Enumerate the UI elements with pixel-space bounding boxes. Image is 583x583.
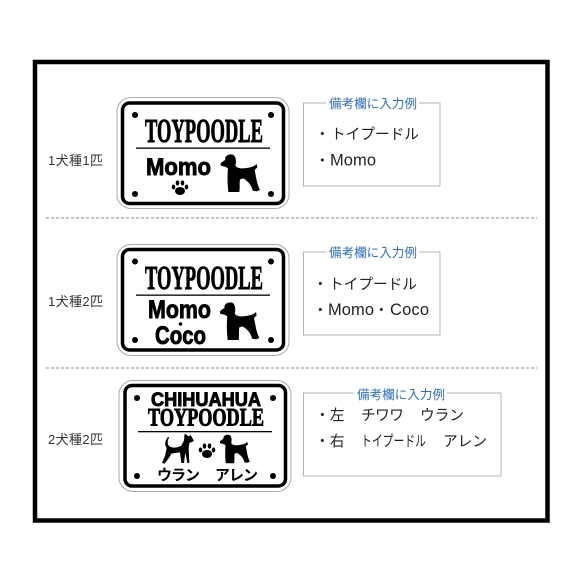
note box 1: トイプードル bbox=[331, 126, 419, 143]
note box 3: ・左 bbox=[315, 407, 344, 424]
note box 3 bbox=[304, 388, 501, 476]
note box 2: 備考欄に入力例 bbox=[329, 246, 417, 260]
note box 3: チワワ bbox=[361, 408, 404, 424]
plate 2: toy poodle, Momo and Coco: TOYPOODLE bbox=[145, 260, 263, 297]
note box 3: アレン bbox=[443, 434, 487, 450]
note box 2: ・ bbox=[374, 303, 389, 319]
note box 3: 備考欄に入力例 bbox=[357, 388, 445, 402]
note box 1: 備考欄に入力例 bbox=[329, 97, 417, 111]
plate 2: toy poodle, Momo and Coco: Momo bbox=[148, 296, 211, 324]
divider: row 1 and 2 bbox=[46, 217, 537, 219]
note box 1 bbox=[304, 97, 440, 186]
note box 2: Momo bbox=[328, 301, 374, 319]
row label: 1犬種2匹: 1犬種2匹 bbox=[48, 294, 103, 309]
note box 2: Coco bbox=[390, 301, 429, 319]
note box 1: ・ bbox=[315, 127, 330, 143]
note box 3: ・右 bbox=[315, 433, 344, 450]
note box 2: トイプードル bbox=[329, 276, 417, 293]
divider: row 2 and 3 bbox=[46, 367, 537, 369]
note box 3: トイプードル bbox=[361, 433, 426, 450]
note box 2: ・ bbox=[313, 303, 328, 319]
plate 2: toy poodle, Momo and Coco: Coco bbox=[155, 322, 206, 350]
plate 3: chihuahua and toy poodle: アレン bbox=[215, 467, 258, 484]
plate 3: chihuahua and toy poodle bbox=[119, 380, 291, 492]
plate 2: toy poodle, Momo and Coco bbox=[117, 244, 289, 356]
row label: 1犬種1匹: 1犬種1匹 bbox=[48, 153, 103, 168]
note box 2 bbox=[304, 246, 440, 335]
note box 2: ・ bbox=[313, 277, 328, 293]
plate 1: toy poodle, Momo: Momo bbox=[146, 154, 211, 181]
plate 1: toy poodle, Momo: TOYPOODLE bbox=[145, 113, 263, 150]
plate 3: chihuahua and toy poodle: TOYPOODLE bbox=[148, 404, 264, 432]
plate 3: chihuahua and toy poodle: CHIHUAHUA bbox=[151, 390, 261, 411]
note box 1: ・ bbox=[315, 154, 330, 170]
plate 1: toy poodle, Momo bbox=[117, 98, 289, 208]
note box 1: Momo bbox=[330, 152, 376, 170]
row label: 2犬種2匹: 2犬種2匹 bbox=[48, 432, 103, 447]
outer frame bbox=[35, 62, 548, 520]
note box 3: ウラン bbox=[420, 407, 464, 424]
plate 3: chihuahua and toy poodle: ウラン bbox=[157, 467, 200, 484]
